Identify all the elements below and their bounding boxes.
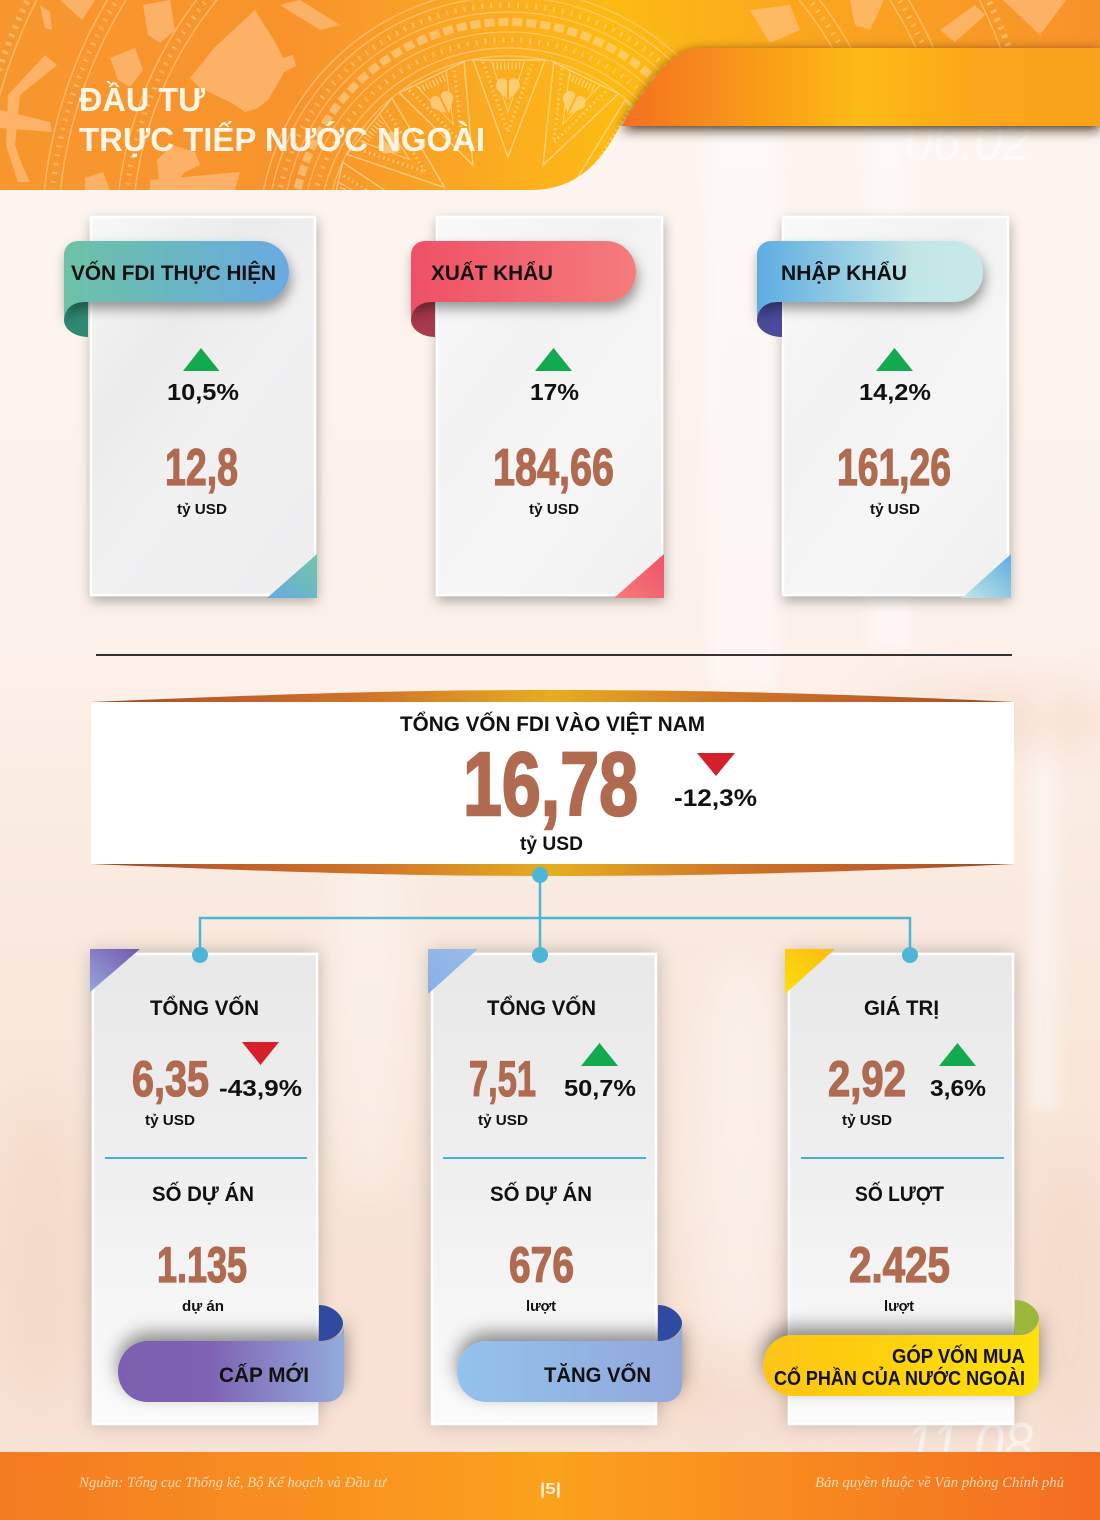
corner fold [267,554,317,598]
unit: tỷ USD [520,834,583,855]
ribbon label: VỐN FDI THỰC HIỆN [71,261,276,285]
heading: SỐ DỰ ÁN [490,1182,592,1206]
panel: capital increase [428,949,682,1424]
header banner with drum pattern [0,0,1100,190]
ribbon label [774,1344,1025,1390]
heading: TỔNG VỐN [150,996,259,1020]
divider [105,1157,307,1159]
unit: tỷ USD [529,501,579,518]
value: 7,51 [469,1051,536,1107]
copyright: Bản quyền thuộc về Văn phòng Chính phủ [815,1475,1064,1491]
unit: tỷ USD [145,1112,195,1129]
bottom arc [91,864,1014,876]
down arrow [242,1042,279,1065]
panel: capital contribution [763,949,1039,1424]
card sheet [432,954,656,1424]
unit: tỷ USD [478,1112,528,1129]
ribbon fold [1015,1300,1039,1335]
unit: tỷ USD [177,501,227,518]
unit: tỷ USD [870,501,920,518]
down arrow [697,753,735,776]
panel: new licences [90,949,344,1424]
ribbon fold [319,1305,343,1341]
unit: lượt [884,1298,914,1315]
panel: exports [411,217,664,598]
heading: TỔNG VỐN [487,996,596,1020]
page background: 11.08 [905,1411,1033,1480]
connector tree [192,867,918,963]
heading: SỐ LƯỢT [855,1182,944,1206]
ribbon [757,241,983,320]
corner fold [428,949,478,994]
ribbon label: GÓP VỐN MUA [892,1344,1025,1368]
top arc [91,690,1014,702]
value: 161,26 [837,439,951,497]
card sheet [437,217,662,595]
change: -12,3% [674,785,757,812]
unit: lượt [526,1298,556,1315]
value: 16,78 [463,735,638,835]
corner fold [90,949,140,992]
unit: tỷ USD [842,1112,892,1129]
change: 10,5% [167,379,239,405]
divider [801,1157,1004,1159]
panel: imports [757,217,1011,598]
change: 50,7% [564,1075,636,1101]
value: 1.135 [157,1237,247,1293]
change: 14,2% [859,379,931,405]
title: TRỰC TIẾP NƯỚC NGOÀI [79,121,485,158]
ribbon fold [411,302,435,337]
card sheet [783,217,1008,595]
ribbon [118,1324,344,1402]
value: 2,92 [828,1051,906,1107]
ribbon [457,1324,682,1402]
heading: GIÁ TRỊ [864,997,939,1020]
ribbon label: NHẬP KHẨU [781,261,907,285]
heading: SỐ DỰ ÁN [152,1182,254,1206]
ribbon label: CẤP MỚI [219,1363,309,1387]
title [79,81,485,158]
ribbon label: TĂNG VỐN [544,1363,651,1387]
panel: total FDI [91,690,1014,876]
divider [443,1157,646,1159]
card sheet [91,217,315,595]
up arrow [939,1043,976,1066]
up arrow [535,348,572,371]
source: Nguồn: Tổng cục Thống kê, Bộ Kế hoạch và Đầu tư [78,1475,387,1491]
corner fold [962,554,1011,598]
change: -43,9% [219,1075,302,1101]
change: 3,6% [930,1075,986,1101]
card sheet [789,954,1013,1424]
ribbon label: XUẤT KHẨU [431,262,553,285]
title: ĐẦU TƯ [79,81,206,118]
header ribbon [621,48,1100,126]
page background: 06.02 [905,109,1030,172]
ribbon [763,1318,1039,1396]
corner fold [614,554,664,598]
ribbon [64,241,289,320]
up arrow [581,1043,618,1066]
unit: dự án [182,1298,224,1315]
ribbon label: CỔ PHẦN CỦA NƯỚC NGOÀI [774,1366,1025,1390]
value: 184,66 [493,439,614,497]
corner fold [785,949,835,994]
ribbon fold [658,1305,682,1341]
ribbon fold [64,302,88,337]
value: 2.425 [849,1237,950,1293]
change: 17% [530,379,579,405]
value: 12,8 [165,439,238,497]
white band [91,702,1014,864]
value: 6,35 [132,1051,209,1107]
footer [0,1452,1100,1520]
page number: |5| [540,1481,561,1498]
value: 676 [509,1237,574,1293]
heading: TỔNG VỐN FDI VÀO VIỆT NAM [400,712,705,736]
panel: FDI disbursed [64,217,317,598]
ribbon fold [757,302,782,337]
up arrow [183,348,220,371]
ribbon [411,241,636,320]
up arrow [876,348,913,371]
card sheet [93,954,317,1424]
